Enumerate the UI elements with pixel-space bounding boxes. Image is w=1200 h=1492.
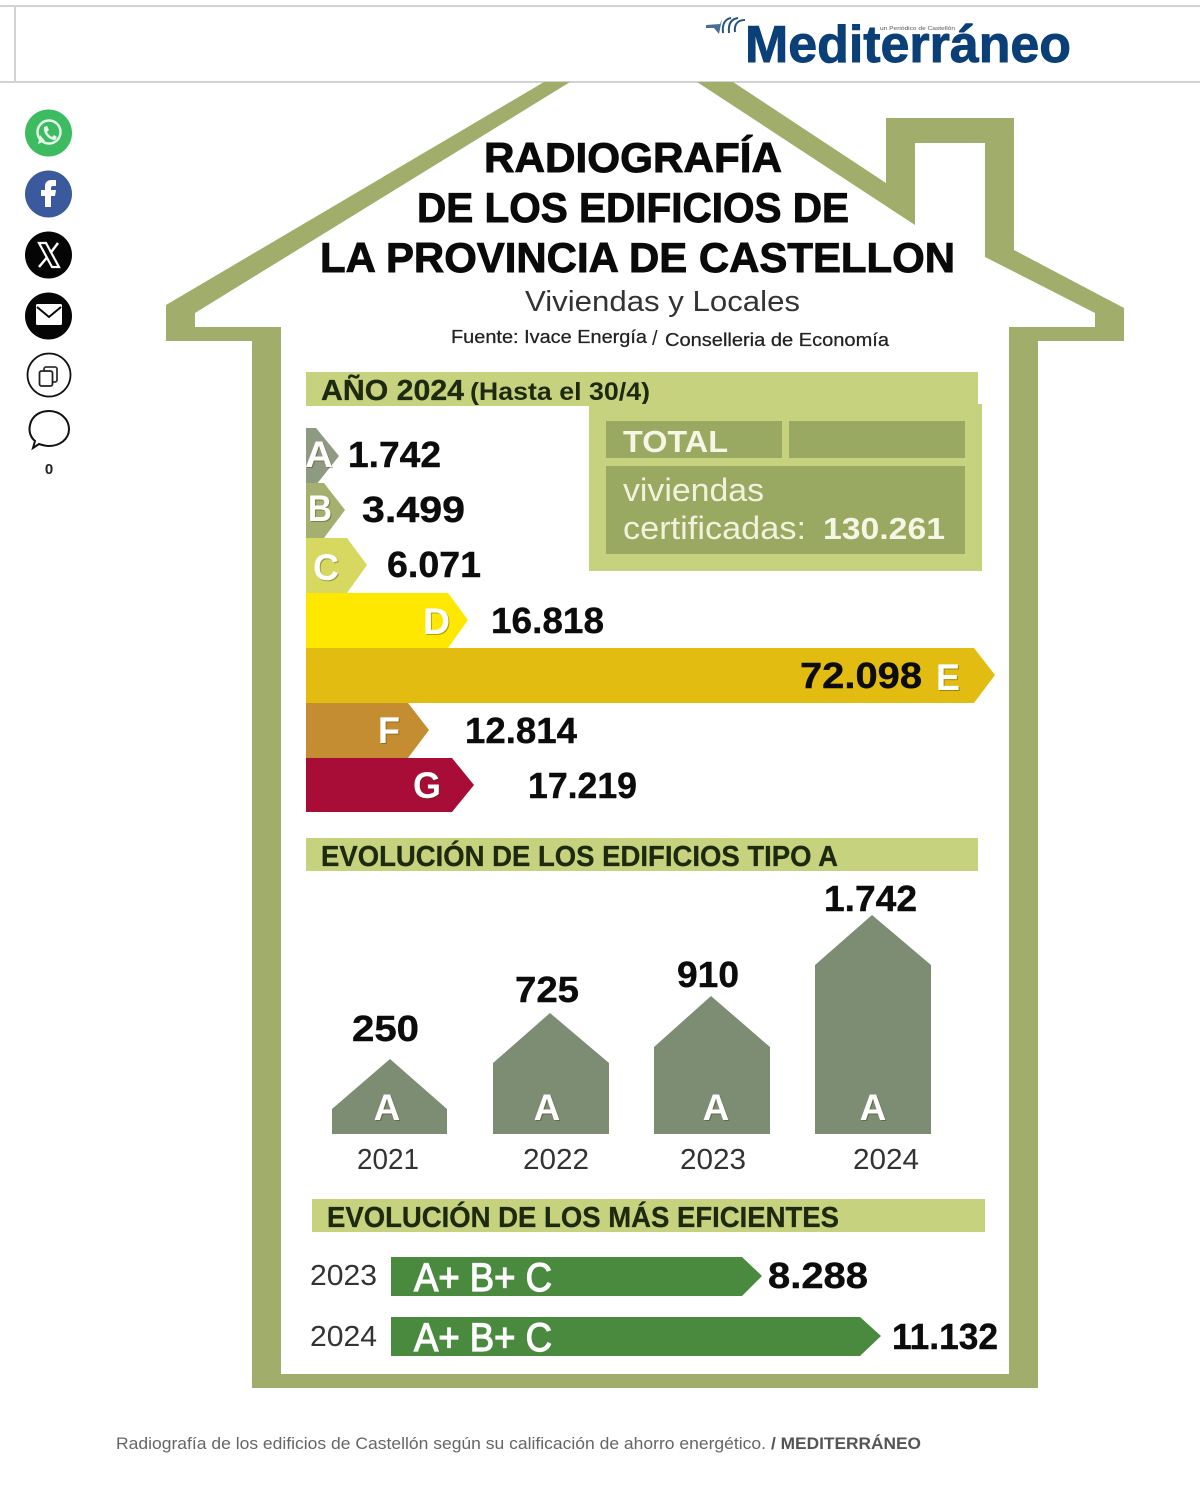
share icons column [25, 110, 72, 478]
house 2022: A [534, 1087, 560, 1128]
bar D: D [423, 601, 450, 642]
bar E: E [936, 657, 960, 698]
bar 2024: 11.132 [892, 1316, 998, 1357]
title: RADIOGRAFÍA [484, 134, 782, 181]
source: / [652, 328, 658, 350]
bar B: B [308, 488, 332, 529]
house 2024 [815, 878, 931, 1176]
bar 2024: 2024 [310, 1321, 377, 1353]
section heading: tipo A: EVOLUCIÓN DE LOS EDIFICIOS TIPO A [321, 839, 838, 873]
section heading: más eficientes: EVOLUCIÓN DE LOS MÁS EFICIENTES [327, 1200, 839, 1234]
panel: total: viviendas [623, 472, 764, 508]
bar E [306, 648, 995, 703]
bar A [305, 428, 441, 485]
bar E: 72.098 [800, 655, 922, 696]
bar A: 1.742 [348, 434, 441, 475]
title [320, 134, 955, 281]
logo: Mediterráneo: un Periódico de Castellón [880, 26, 955, 32]
source [451, 327, 890, 350]
house 2021: 250 [352, 1008, 419, 1049]
house 2022: 725 [515, 969, 579, 1010]
section heading: Año 2024: AÑO 2024 [321, 373, 464, 407]
bar G [306, 758, 637, 812]
bar G: 17.219 [528, 765, 637, 806]
header bar [0, 5, 1200, 83]
icon: X [25, 232, 72, 278]
icon: comment bubble [30, 411, 69, 448]
bar B: 3.499 [362, 489, 465, 530]
title: DE LOS EDIFICIOS DE [417, 184, 849, 231]
house 2023: 910 [677, 954, 739, 995]
bar 2023 [310, 1255, 868, 1300]
chart: energy rating bars [305, 428, 995, 812]
chart: efficient buildings bars [310, 1255, 998, 1360]
logo: Mediterráneo: Mediterráneo [745, 16, 1071, 74]
house outline [166, 82, 1124, 1388]
bar F: 12.814 [465, 710, 577, 751]
chart: type A house bars [332, 878, 931, 1176]
source: Conselleria de Economía [665, 330, 890, 350]
house 2024: 1.742 [824, 878, 917, 919]
subtitle: Viviendas y Locales [525, 286, 800, 318]
panel: total: 130.261 [823, 511, 945, 546]
house 2024: 2024 [853, 1144, 919, 1176]
icon: WhatsApp [25, 110, 72, 156]
house 2022 [493, 969, 609, 1176]
bar B [306, 483, 465, 538]
icon: email [25, 292, 72, 340]
section heading: Año 2024 [306, 372, 978, 407]
house 2022: 2022 [523, 1144, 589, 1176]
bar C: C [313, 547, 339, 588]
icon: copy [28, 354, 70, 396]
house 2023: 2023 [680, 1144, 746, 1176]
bar 2024: A+ B+ C [414, 1316, 552, 1360]
source: Fuente: Ivace Energía [451, 327, 648, 347]
section heading: Año 2024: (Hasta el 30/4) [470, 378, 650, 406]
house 2021 [332, 1008, 447, 1176]
bar C [306, 538, 481, 593]
caption: / MEDITERRÁNEO [771, 1434, 921, 1453]
house 2023: A [703, 1087, 729, 1128]
caption: Radiografía de los edificios de Castellón según su calificación de ahorro energético. [116, 1434, 766, 1453]
bar D: 16.818 [491, 600, 604, 641]
icon: Facebook [25, 170, 72, 218]
house 2021: A [374, 1087, 400, 1128]
bar G: G [413, 765, 441, 806]
bar F [306, 703, 577, 758]
bar F: F [378, 710, 400, 751]
panel: total: certificadas: [623, 510, 806, 546]
house 2024: A [860, 1087, 886, 1128]
title: LA PROVINCIA DE CASTELLON [320, 234, 955, 281]
house 2021: 2021 [357, 1144, 419, 1176]
bar 2023: 8.288 [768, 1255, 868, 1296]
panel: total: TOTAL [623, 424, 728, 459]
bar A: A [305, 434, 333, 475]
bar C: 6.071 [387, 544, 481, 585]
bar D [306, 593, 604, 648]
comment count: 0 [45, 461, 53, 478]
bar 2024 [310, 1316, 998, 1360]
panel: total [589, 404, 982, 571]
bar 2023: A+ B+ C [414, 1256, 552, 1300]
bar 2023: 2023 [310, 1260, 377, 1292]
house 2023 [654, 954, 770, 1176]
